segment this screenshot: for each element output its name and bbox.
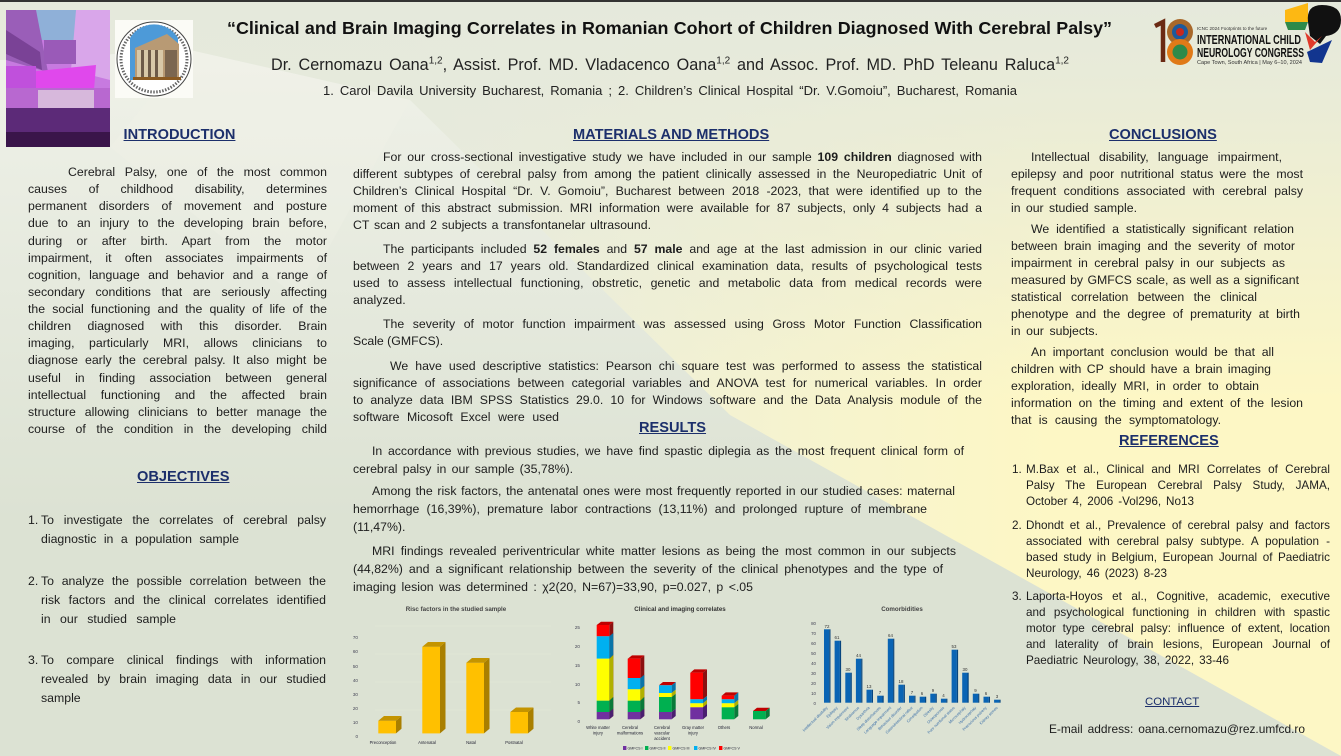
text block: conclusions: that is causing the symptomatology. bbox=[1011, 413, 1221, 427]
text block: introduction: secondary conditions that are seriously affecting bbox=[28, 285, 327, 299]
text block: introduction: intellectual functioning and the affected brain bbox=[28, 388, 327, 402]
text block: materials and methods: used to assess intellectual functioning, obstretic, genetic and metabolic data from medical records were bbox=[353, 276, 982, 290]
chart: risk factors: Antenatal bbox=[418, 740, 436, 745]
logo: university seal bbox=[115, 20, 193, 98]
chart: risk factors: 10 bbox=[353, 720, 358, 725]
chart: comorbidities: Strabismus bbox=[844, 706, 860, 722]
chart: comorbidities: 30 bbox=[811, 671, 817, 676]
chart: clinical and imaging correlates: Cerebral bbox=[622, 725, 638, 730]
text block: results: (11,47%). bbox=[353, 520, 405, 534]
list: objectives: 2. bbox=[28, 574, 38, 588]
chart: clinical and imaging correlates: Clinical and imaging correlates bbox=[634, 606, 726, 613]
chart: comorbidities: 80 bbox=[811, 621, 817, 626]
chart: risk factors: Natal bbox=[466, 740, 476, 745]
chart legend bbox=[623, 746, 740, 750]
list: objectives: sample bbox=[41, 691, 81, 705]
chart: clinical and imaging correlates: Others bbox=[718, 725, 730, 730]
chart: comorbidities: 50 bbox=[811, 651, 817, 656]
chart: comorbidities: 3 bbox=[996, 694, 999, 699]
chart: comorbidities: Obesity bbox=[923, 706, 935, 718]
chart: comorbidities: 9 bbox=[932, 688, 935, 693]
text block: results: imaging lesion was determined : χ2(20, N=67)=33,90, p=0.027, p <.05 bbox=[353, 580, 753, 594]
chart: clinical and imaging correlates: 5 bbox=[577, 700, 580, 705]
chart: comorbidities: 20 bbox=[811, 681, 817, 686]
chart: comorbidities: 61 bbox=[835, 635, 840, 640]
list: references: October 4, 2006 -Vol296, No13 bbox=[1026, 495, 1194, 508]
list: references: motor type cerebral palsy: influence of extent, location bbox=[1026, 622, 1330, 635]
text block: conclusions: phenotype and the degree of prematurity at birth bbox=[1011, 307, 1300, 321]
chart: comorbidities: 10 bbox=[811, 691, 817, 696]
list: references: 2. bbox=[1012, 519, 1022, 532]
list: references: 3. bbox=[1012, 590, 1022, 603]
chart: comorbidities: Gastrointestinal reflux bbox=[885, 706, 914, 735]
text block: conclusions: exploration, ideally MRI, in order to obtain bbox=[1011, 379, 1259, 393]
chart: risk factors: 50 bbox=[353, 664, 358, 669]
text block: results: (44,82%) and a significant relationship between the severity of the clinical phenotypes and the type of bbox=[353, 562, 943, 576]
text: contact email: E-mail address: oana.cernomazu@rez.umfcd.ro bbox=[1049, 722, 1305, 736]
list: objectives: To analyze the possible correlation between the bbox=[41, 574, 326, 588]
logo: ICNC congress bbox=[1154, 3, 1341, 66]
chart: clinical and imaging correlates bbox=[575, 606, 770, 750]
chart: comorbidities: Epilepsy bbox=[826, 706, 839, 719]
chart: comorbidities: 13 bbox=[867, 684, 872, 689]
chart: clinical and imaging correlates: 15 bbox=[575, 663, 580, 668]
chart legend: GMFCS IV bbox=[698, 746, 716, 750]
text block: materials and methods: to analyze data IBM SPSS Statistics 29.0. 10 for Windows software and the Data Analysis module of the bbox=[353, 393, 982, 407]
chart legend: GMFCS II bbox=[650, 746, 665, 750]
text block: materials and methods: different subtypes of cerebral palsy from among the patient clinically assessed in the Neuropediatric Unit of bbox=[353, 167, 982, 181]
text block: conclusions: We identified a statistically significant relation bbox=[1031, 222, 1294, 236]
list: references bbox=[1012, 463, 1330, 667]
chart: risk factors: Risc factors in the studied sample bbox=[406, 606, 507, 613]
text block: materials and methods: between 2 years and 17 years old. Standardized clinical examination data, results of psychological tests bbox=[353, 259, 982, 273]
chart: comorbidities: Osteoporosis bbox=[927, 706, 945, 725]
text block: materials and methods: Children’s Clinical Hospital “Dr. V. Gomoiu”, Bucharest between 2018 -2023, that were identified up to the bbox=[353, 184, 982, 198]
chart: comorbidities: Kidney stones bbox=[979, 706, 999, 726]
text block: results: cerebral palsy in our sample (35,78%). bbox=[353, 462, 573, 476]
chart: comorbidities: 30 bbox=[963, 667, 968, 672]
text block: materials and methods: CT scan and 2 subjects a transfontanelar ultrasound. bbox=[353, 218, 651, 232]
chart: clinical and imaging correlates: Gray matter bbox=[682, 725, 705, 730]
text block: introduction: imaging, particularly MRI, allows clinicians to bbox=[28, 336, 327, 350]
chart: risk factors bbox=[353, 606, 534, 745]
chart: comorbidities: 53 bbox=[952, 644, 957, 649]
list: objectives: revealed by brain imaging data in our studied bbox=[41, 672, 326, 686]
chart: comorbidities: 6 bbox=[985, 691, 988, 696]
text block: materials and methods: Scale (GMFCS). bbox=[353, 334, 443, 348]
chart: comorbidities: 72 bbox=[825, 624, 830, 629]
list: references: associated with cerebral palsy subtype. A population - bbox=[1026, 535, 1330, 548]
chart: comorbidities: 64 bbox=[888, 633, 893, 638]
text block: introduction: permanent disorders of movement and posture bbox=[28, 199, 327, 213]
chart: comorbidities: 7 bbox=[911, 690, 914, 695]
affiliations: 1. Carol Davila University Bucharest, Romania ; 2. Children’s Clinical Hospital “Dr. V.Gomoiu”, Bucharest, Romania bbox=[323, 83, 1017, 98]
title: “Clinical and Brain Imaging Correlates in Romanian Cohort of Children Diagnosed With Cerebral Palsy” bbox=[227, 18, 1112, 38]
text block: introduction: causes of childhood disability, determines bbox=[28, 182, 327, 196]
stacked bar: white matter injury bbox=[597, 622, 613, 719]
heading: results: RESULTS bbox=[639, 420, 706, 436]
chart: comorbidities: 30 bbox=[846, 667, 851, 672]
text block: introduction: diagnose early the cerebral palsy. It also might be bbox=[28, 353, 327, 367]
list: objectives: risk factors and the clinical correlates identified bbox=[41, 593, 326, 607]
chart: clinical and imaging correlates: injury bbox=[688, 730, 699, 736]
chart: comorbidities: 4 bbox=[942, 693, 945, 698]
text block: conclusions bbox=[1011, 150, 1303, 427]
chart: comorbidities: Microcephaly bbox=[948, 706, 967, 725]
chart: comorbidities: 44 bbox=[856, 653, 861, 658]
text block: materials and methods: The severity of motor function impairment was assessed using Gross Motor Function Classification bbox=[383, 317, 982, 331]
text block: introduction: cognition, language and behavior and a range of bbox=[28, 268, 327, 282]
chart: risk factors: 0 bbox=[355, 734, 358, 739]
text block: conclusions: in our studied sample. bbox=[1011, 201, 1137, 215]
logo: ICNC congress: Cape Town, South Africa | May 6–10, 2024 bbox=[1197, 60, 1302, 66]
chart: clinical and imaging correlates: Normal bbox=[749, 725, 763, 730]
list: objectives: in our studied sample bbox=[41, 612, 176, 626]
stacked bar: cerebral vascular accident bbox=[659, 682, 676, 719]
chart: risk factors: Preconception bbox=[370, 740, 397, 745]
chart legend: GMFCS I bbox=[628, 746, 642, 750]
chart: comorbidities: Behaviour disorder bbox=[877, 705, 903, 731]
logo: ICNC congress: ICNC 2024 Footprints to the future bbox=[1197, 26, 1268, 31]
text block: introduction: Cerebral Palsy, one of the most common bbox=[68, 165, 327, 179]
text block: results: MRI findings revealed periventricular white matter lesions as being the most common in our subjects bbox=[372, 544, 956, 558]
chart: clinical and imaging correlates: vascular bbox=[654, 730, 670, 736]
heading: materials and methods: MATERIALS AND METHODS bbox=[573, 127, 769, 143]
text block: materials and methods: significance of associations between categorial variables and ANOVA test for numerical variables. In order bbox=[353, 376, 982, 390]
text block: materials and methods: software Micosoft Excel were used bbox=[353, 410, 559, 424]
chart: risk factors: Postnatal bbox=[505, 740, 523, 745]
list: objectives bbox=[28, 513, 326, 705]
chart: comorbidities: Vision impairment bbox=[826, 705, 850, 730]
chart: clinical and imaging correlates: injury bbox=[593, 730, 604, 736]
chart: risk factors: 20 bbox=[353, 706, 358, 711]
list: references: and psychological functioning in children with spastic bbox=[1026, 606, 1330, 619]
list: references: Dhondt et al., Prevalence of cerebral palsy and factors bbox=[1026, 519, 1330, 532]
text block: introduction: due to an injury to the developing brain before, bbox=[28, 216, 327, 230]
text block: introduction: impairment, it often associates impairments of bbox=[28, 251, 327, 265]
stacked bar: others bbox=[722, 692, 738, 719]
logo: ICNC congress: INTERNATIONAL CHILD bbox=[1197, 33, 1301, 47]
stacked bar: normal bbox=[753, 708, 770, 719]
text block: conclusions: impairment in cerebral palsy in our subjects as bbox=[1011, 256, 1285, 270]
text block: conclusions: Intellectual disability, language impairment, bbox=[1031, 150, 1282, 164]
chart: clinical and imaging correlates: accident bbox=[654, 736, 671, 741]
list: references: 1. bbox=[1012, 463, 1022, 476]
list: references: M.Bax et al., Clinical and MRI Correlates of Cerebral bbox=[1026, 463, 1330, 476]
text block: conclusions: between brain imaging and the severity of motor bbox=[1011, 239, 1295, 253]
list: references: Paediatric Neurology, 38, 2022, 33-46 bbox=[1026, 654, 1229, 667]
text block: materials and methods: analyzed. bbox=[353, 293, 406, 307]
chart: clinical and imaging correlates: White matter bbox=[586, 725, 610, 730]
chart: clinical and imaging correlates: 0 bbox=[577, 719, 580, 724]
chart: clinical and imaging correlates: malformations bbox=[617, 730, 643, 736]
chart: clinical and imaging correlates: Cerebral bbox=[654, 725, 670, 730]
chart: comorbidities: Precocious puberty bbox=[962, 706, 988, 732]
list: references: and laterality of brain lesions, European Journal of bbox=[1026, 638, 1330, 651]
text block: conclusions: children with CP should have a brain imaging bbox=[1011, 362, 1271, 376]
chart: comorbidities: Language impairment bbox=[863, 705, 893, 735]
text block: conclusions: epilepsy and poor nutritional status were the most bbox=[1011, 167, 1303, 181]
list: references: Palsy The European Cerebral Palsy Study, JAMA, bbox=[1026, 479, 1330, 492]
text block: materials and methods: moment of this abstract submission. MRI information were available for 87 subjects, only 4 subjects had a bbox=[353, 201, 982, 215]
chart: comorbidities: 9 bbox=[974, 688, 977, 693]
chart: comorbidities: Dysarthria bbox=[856, 705, 871, 721]
list: objectives: 1. bbox=[28, 513, 38, 527]
text block: conclusions: An important conclusion would be that all bbox=[1031, 345, 1274, 359]
heading: objectives: OBJECTIVES bbox=[137, 469, 229, 485]
chart: clinical and imaging correlates: 20 bbox=[575, 644, 580, 649]
text block: conclusions: frequent conditions associated with cerebral palsy bbox=[1011, 184, 1303, 198]
chart: comorbidities: Sleep disturbances bbox=[856, 706, 882, 732]
text block: materials and methods bbox=[353, 150, 982, 424]
text block: introduction: structure allowing clinicians to better manage the bbox=[28, 405, 327, 419]
list: references: Neurology, 46 (2023) 8-23 bbox=[1026, 567, 1167, 580]
chart: clinical and imaging correlates: 25 bbox=[575, 625, 580, 630]
list: objectives: To compare clinical findings with information bbox=[41, 653, 326, 667]
chart legend: GMFCS V bbox=[724, 746, 740, 750]
chart: comorbidities: 60 bbox=[811, 641, 817, 646]
list: references: Laporta-Hoyos et al., Cognitive, academic, executive bbox=[1026, 590, 1330, 603]
chart: comorbidities: 70 bbox=[811, 631, 817, 636]
list: references: based study in Belgium, European Journal of Paediatric bbox=[1026, 551, 1330, 564]
chart: risk factors: 40 bbox=[353, 678, 358, 683]
chart: comorbidities: 40 bbox=[811, 661, 817, 666]
authors: Dr. Cernomazu Oana1,2, Assist. Prof. MD. Vladacenco Oana1,2 and Assoc. Prof. MD. PhD Teleanu Raluca1,2 bbox=[271, 56, 1069, 74]
text block: results: Among the risk factors, the antenatal ones were most frequently reported in our studied cases: maternal bbox=[372, 484, 955, 498]
text block: conclusions: information on the timing and extent of the lesion bbox=[1011, 396, 1303, 410]
heading: references: REFERENCES bbox=[1119, 433, 1219, 449]
chart: comorbidities bbox=[802, 606, 1001, 735]
text block: conclusions: measured by GMFCS scale, as well as a significant bbox=[1011, 273, 1299, 287]
text block: materials and methods: We have used descriptive statistics: Pearson chi square test was performed to assess the statistical bbox=[390, 359, 982, 373]
list: objectives: diagnostic in a population sample bbox=[41, 532, 239, 546]
stacked bar: gray matter injury bbox=[690, 669, 707, 719]
heading: contact: CONTACT bbox=[1145, 696, 1199, 708]
text block: introduction: course of the condition in the developing child bbox=[28, 422, 327, 436]
stacked bar: cerebral malformations bbox=[628, 655, 644, 719]
text block: results bbox=[353, 444, 964, 594]
chart: comorbidities: 0 bbox=[814, 701, 817, 706]
photo: hospital building bbox=[6, 10, 110, 147]
chart: comorbidities: Poor nutritional status bbox=[927, 706, 956, 735]
text block: materials and methods: The participants included 52 females and 57 male and age at the last admission in our clinic varied bbox=[383, 242, 982, 256]
text block: introduction: useful in finding association between general bbox=[28, 370, 327, 384]
text block: introduction bbox=[28, 165, 328, 436]
chart: comorbidities: 6 bbox=[921, 691, 924, 696]
list: objectives: To investigate the correlates of cerebral palsy bbox=[41, 513, 326, 527]
text block: conclusions: in our subjects. bbox=[1011, 324, 1098, 338]
chart: risk factors: 60 bbox=[353, 649, 358, 654]
chart: comorbidities: Constipation bbox=[906, 706, 924, 724]
chart: comorbidities: Comorbidities bbox=[881, 606, 923, 613]
text block: conclusions: statistical correlation between the clinical bbox=[1011, 290, 1257, 304]
list: objectives: 3. bbox=[28, 653, 38, 667]
chart: clinical and imaging correlates: 10 bbox=[575, 682, 580, 687]
text block: introduction: during or after birth. Apart from the motor bbox=[28, 234, 327, 248]
chart: comorbidities: Hydrocephaly bbox=[958, 706, 977, 725]
text block: introduction: children diagnosed with this disorder. Brain bbox=[28, 319, 327, 333]
text block: results: In accordance with previous studies, we have find spastic diplegia as the most frequent clinical form of bbox=[372, 444, 964, 458]
heading: introduction: INTRODUCTION bbox=[124, 127, 235, 143]
text block: introduction: the social functioning and the quality of life of the bbox=[28, 302, 327, 316]
chart: comorbidities: 18 bbox=[899, 679, 904, 684]
chart: comorbidities: 7 bbox=[879, 690, 882, 695]
text block: materials and methods: For our cross-sectional investigative study we have included in our sample 109 children diagnosed with bbox=[383, 150, 982, 164]
chart: comorbidities: Intellectual disability bbox=[802, 706, 829, 733]
text block: results: hemorrhage (16,39%), premature labor contractions (13,11%) and prolonged rupture of membrane bbox=[353, 502, 927, 516]
chart legend: GMFCS III bbox=[672, 746, 689, 750]
chart: risk factors: 70 bbox=[353, 635, 358, 640]
heading: conclusions: CONCLUSIONS bbox=[1109, 127, 1217, 143]
chart: risk factors: 30 bbox=[353, 692, 358, 697]
